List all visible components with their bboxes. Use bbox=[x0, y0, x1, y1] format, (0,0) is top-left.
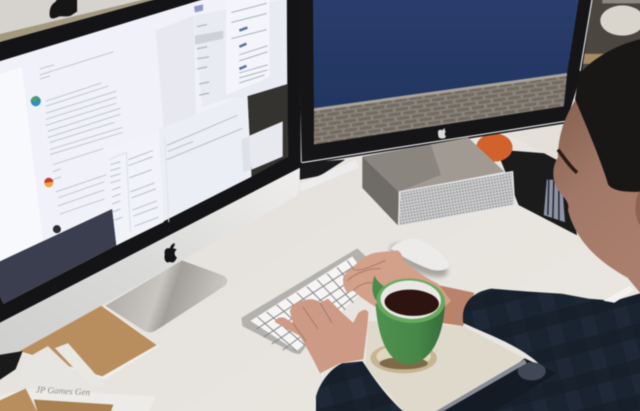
apple logo front bbox=[164, 243, 177, 262]
black cable at left bbox=[0, 351, 23, 381]
keyboard bbox=[241, 248, 372, 354]
stand bbox=[105, 260, 227, 332]
apple logo on back of monitor bbox=[50, 0, 77, 19]
back desk piece bbox=[504, 120, 566, 163]
dark area under desk with stripes bbox=[496, 150, 577, 235]
document text lines bbox=[40, 52, 122, 214]
silver chin bbox=[0, 168, 300, 359]
coaster bbox=[370, 343, 437, 373]
apple logo small bbox=[438, 128, 446, 138]
dark desktop wallpaper bottom bbox=[0, 207, 116, 304]
avatar black bbox=[53, 225, 61, 233]
avatar green blue bbox=[31, 96, 41, 106]
bezel bbox=[0, 0, 301, 325]
avatar red yellow bbox=[44, 178, 53, 187]
tan folder left bbox=[0, 388, 38, 411]
floating window bbox=[105, 94, 251, 245]
small white stand and cables between monitors bbox=[300, 160, 358, 192]
brick wallpaper bbox=[314, 74, 567, 145]
under-desk shadow and chair bbox=[434, 359, 557, 411]
mouse bbox=[386, 237, 452, 284]
beige desk shadow around cup bbox=[365, 321, 525, 411]
inspector panel bbox=[194, 0, 287, 107]
right monitor bbox=[298, 0, 592, 165]
screen bbox=[0, 0, 288, 304]
perforated front grille bbox=[399, 172, 515, 226]
left sleeve bbox=[316, 361, 405, 411]
hair bbox=[575, 39, 640, 192]
blue screen bbox=[313, 0, 579, 109]
silver computer bbox=[362, 137, 515, 226]
shirt: arm and torso bbox=[451, 289, 640, 411]
desk front edge bbox=[434, 359, 527, 411]
man's upper forearm bbox=[426, 284, 474, 326]
ear bbox=[636, 190, 640, 226]
green mug bbox=[372, 276, 446, 364]
handwriting note: JP Games Gen bbox=[36, 384, 91, 397]
gray column bbox=[156, 15, 196, 129]
background behind monitors, top right clutter bbox=[577, 0, 640, 89]
orange object bbox=[476, 133, 513, 162]
upper hand on keyboard bbox=[343, 250, 451, 321]
sidebar left bbox=[0, 67, 43, 262]
man's head and neck bbox=[553, 39, 640, 296]
eyebrow bbox=[558, 150, 577, 173]
lower hand on keyboard bbox=[275, 299, 368, 373]
coffee bbox=[384, 288, 440, 317]
notebook bbox=[20, 306, 159, 379]
tan folder bottom bbox=[34, 400, 113, 411]
left monitor back and wall bbox=[0, 0, 159, 43]
left monitor bbox=[0, 0, 301, 359]
papers bbox=[0, 343, 156, 411]
